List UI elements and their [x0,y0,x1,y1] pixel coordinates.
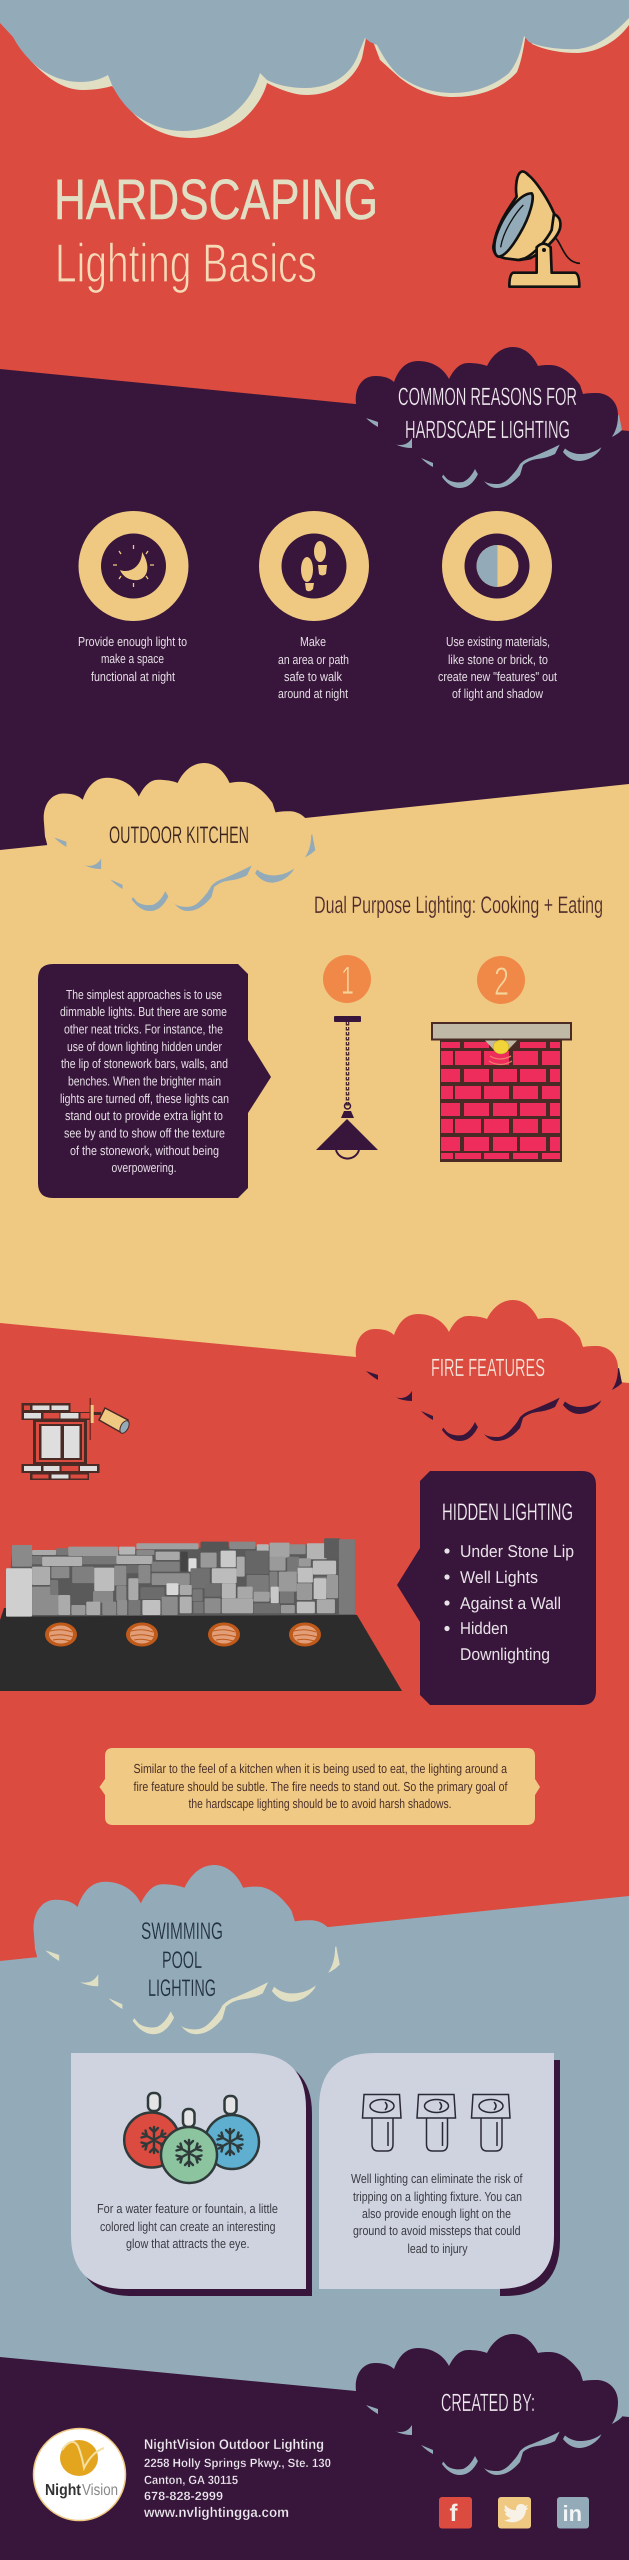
contact details: NightVision Outdoor Lighting [144,2436,324,2452]
reason 2 text: Make [300,634,326,649]
panel: water feature [71,2053,312,2296]
logo: NightVision [34,2428,126,2520]
icon: facebook: f [450,2500,458,2527]
reason 2: footprints icon [259,511,369,621]
reason 3 text: like stone or brick, to [448,652,548,667]
reason 2 text: an area or path [278,652,349,667]
contact details: Canton, GA 30115 [144,2473,238,2487]
icon: colored ornaments [124,2093,259,2183]
icon: three well lights [362,2094,510,2151]
reason 1 text: Provide enough light to [78,634,187,649]
callout: kitchen text box: dimmable lights. But there are some [60,1004,227,1019]
number badge 1 [323,955,371,1003]
icon: spotlight [493,172,580,287]
number badge 2: 2 [494,960,509,1004]
callout: kitchen text box: stand out to provide extra light to [65,1108,223,1123]
reason 1 text: functional at night [91,669,175,684]
reason 2 text [278,634,349,701]
hidden lighting list: Hidden [460,1619,508,1638]
logo: NightVision: Vision [82,2482,118,2499]
panel: hidden lighting [397,1471,596,1705]
icon: twitter [498,2497,531,2528]
icon: brick wall with hidden light [432,1023,571,1162]
reason 1: moon icon [78,511,188,621]
contact details: 678-828-2999 [144,2489,223,2503]
hidden lighting list: Downlighting [460,1645,550,1664]
well lighting text: tripping on a lighting fixture. You can [353,2189,522,2204]
number badge 2 [477,956,525,1004]
contact details [143,2436,331,2520]
reason 2 text: around at night [278,686,348,701]
water feature text: glow that attracts the eye. [126,2236,250,2251]
reason 2 text: safe to walk [284,669,342,684]
callout: fire feature note: Similar to the feel of a kitchen when it is being used to eat, the lighting around a [134,1761,508,1776]
dark ground slab [0,1608,402,1691]
cloud: common reasons [356,347,622,488]
callout: kitchen text box: The simplest approaches is to use [66,987,222,1002]
cloud: swimming pool lighting: LIGHTING [148,1975,216,2002]
reason 1 text [78,634,187,684]
logo: NightVision: Night [45,2482,82,2499]
callout: fire feature note: the hardscape lighting should be to avoid harsh shadows. [188,1796,452,1811]
well lighting text [351,2171,523,2256]
icon: facebook [439,2497,472,2528]
hidden lighting list: Under Stone Lip [460,1542,574,1561]
cloud: swimming pool lighting: SWIMMING [141,1918,223,1945]
callout: kitchen text box: use of down lighting hidden under [67,1039,223,1054]
icon: pendant lamp [316,1016,378,1159]
contact details: www.nvlightingga.com [143,2504,289,2520]
callout: kitchen text box: lights are turned off, these lights can [60,1091,229,1106]
icon: window with wall spotlight [22,1398,131,1480]
reason 3 text: Use existing materials, [446,634,550,649]
cloud: outdoor kitchen [44,763,315,911]
background: purple band [0,369,629,855]
well lighting text: Well lighting can eliminate the risk of [351,2171,523,2186]
reason 3 text [438,634,557,701]
water feature text: colored light can create an interesting [100,2219,276,2234]
reason 3: half circle icon [442,511,552,621]
water feature text [97,2201,278,2251]
callout: kitchen text box: overpowering. [112,1160,176,1175]
top cloud banner [0,0,629,138]
icon: linkedin [557,2497,589,2528]
stone wall [6,1538,355,1617]
contact details: 2258 Holly Springs Pkwy., Ste. 130 [144,2456,331,2470]
cloud: swimming pool lighting [34,1865,340,2034]
hidden lighting list [444,1542,574,1664]
callout: kitchen text box: of the stonework, without being [70,1143,219,1158]
cloud: created by [356,2334,622,2475]
hidden lighting list: Well Lights [460,1568,538,1587]
background: purple footer band [0,2357,629,2560]
callout: fire feature note: fire feature should be subtle. The fire needs to stand out. So the primary goal of [134,1779,508,1794]
callout: kitchen text box: other neat tricks. For instance, the [64,1022,223,1036]
well lighting text: ground to avoid missteps that could [353,2223,520,2238]
title: HARDSCAPING [54,168,378,232]
title: Lighting Basics [55,232,317,294]
callout: kitchen text box [38,964,271,1198]
cloud: outdoor kitchen: OUTDOOR KITCHEN [109,822,249,849]
background: blue pool band [0,1896,629,2420]
cloud: swimming pool lighting: POOL [162,1947,202,1974]
callout: kitchen text box: benches. When the brighter main [68,1074,221,1088]
number badge 1: 1 [341,959,354,1003]
panel: well lighting [319,2053,560,2296]
reason 3 text: of light and shadow [452,686,543,701]
callout: fire feature note [100,1748,540,1825]
reason 1 text: make a space [101,651,164,666]
reason 3 text: create new "features" out [438,669,557,684]
background: red header band [0,0,629,440]
cloud: created by: CREATED BY: [441,2389,535,2417]
icon: linkedin: in [562,2501,582,2526]
callout: kitchen text box: the lip of stonework bars, walls, and [61,1056,228,1071]
cloud: fire features: FIRE FEATURES [431,1354,545,1382]
ground well lights [45,1622,321,1646]
hidden lighting list: Against a Wall [460,1594,561,1613]
background: red fire band [0,1323,629,1965]
water feature text: For a water feature or fountain, a little [97,2201,278,2216]
callout: kitchen text box: see by and to show off the texture [64,1126,225,1140]
well lighting text: lead to injury [408,2241,468,2256]
cloud: fire features [356,1300,622,1441]
background: tan band [0,784,629,1390]
well lighting text: also provide enough light on the [362,2206,511,2221]
title [54,168,378,294]
